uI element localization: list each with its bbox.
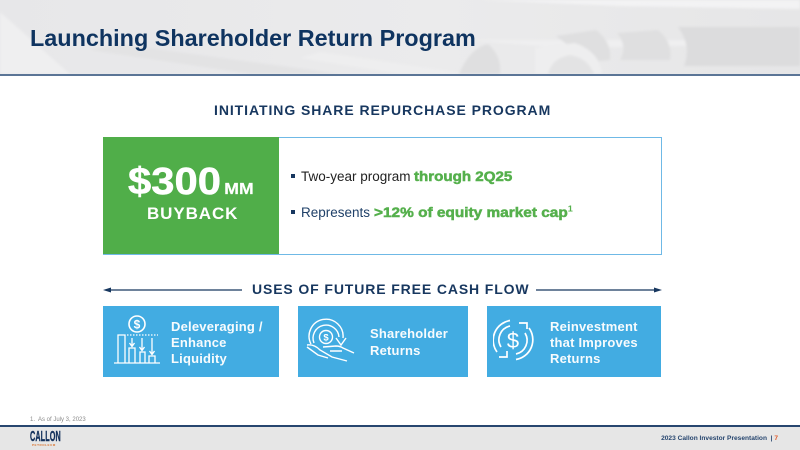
card text: Shareholder [370,326,448,341]
card: shareholder returns [298,306,468,377]
icon: circular dollar arrows: $ [507,328,519,353]
footer rule [0,425,800,427]
arrow: left [103,288,242,292]
card: reinvestment [487,306,661,377]
heading: share repurchase program: INITIATING SHARE REPURCHASE PROGRAM [214,102,551,118]
arrow: right [536,288,662,292]
card text: Liquidity [171,351,227,366]
bullet text 1: Two-year program [301,169,411,184]
heading: uses of future free cash flow: USES OF FUTURE FREE CASH FLOW [252,281,530,297]
footnote: 1. As of July 3, 2023 [30,417,86,423]
bullet text 1: through 2Q25 [414,169,513,184]
icon: debt bars [114,315,160,364]
panel: buyback amount [103,137,279,254]
bullet text 1 [301,169,513,184]
card text: Enhance [171,335,227,350]
title: Launching Shareholder Return Program [30,25,476,51]
card text: Deleveraging / [171,319,263,334]
card: deleveraging [103,306,279,377]
logo subtext: PETROLEUM [32,443,56,447]
panel: buyback details [103,137,662,255]
icon: hand with returning dollar [306,318,354,362]
logo wordmark: CALLON [30,429,61,445]
card text [171,319,263,366]
footer band [0,427,800,450]
bullet marker 1 [291,174,295,178]
buyback label: BUYBACK [147,204,238,223]
icon: debt bars: $ [134,318,141,332]
footer text: 2023 Callon Investor Presentation | 7 [661,435,778,442]
amount: $300MM [128,161,254,203]
header banner with pipes background [0,0,800,76]
card text: that Improves [550,335,638,350]
icon: hand with returning dollar: $ [323,332,329,344]
icon: circular dollar arrows [493,320,534,360]
bullet text 2: >12% of equity market cap1 [374,204,573,220]
bullet text 2: Represents [301,205,370,220]
bullet marker 2 [291,210,295,214]
logo [30,429,61,447]
card text: Returns [550,351,601,366]
card text: Reinvestment [550,319,638,334]
card text [370,326,448,358]
card text [550,319,638,366]
card text: Returns [370,342,421,358]
